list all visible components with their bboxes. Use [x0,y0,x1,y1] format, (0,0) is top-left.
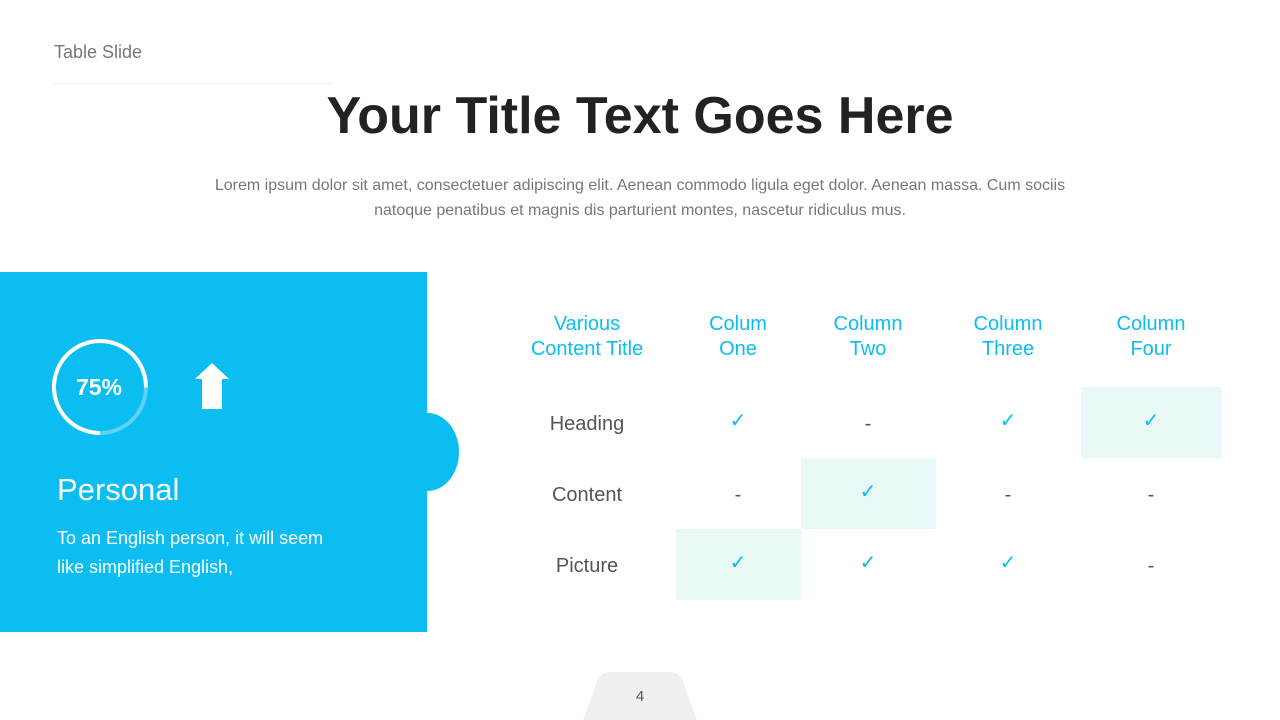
row: content: Content [552,484,622,506]
title: Your Title Text Goes Here [326,87,954,145]
icon: progress ring 75% [52,339,148,435]
table: Column [834,313,902,335]
table: Three [982,338,1034,360]
table: Four [1130,338,1172,360]
table: Colum [709,313,767,335]
panel heading: Personal [57,472,179,507]
table [531,313,1222,600]
panel: personal [0,272,459,632]
row: picture: Picture [556,555,618,577]
table: ✓ [1000,552,1016,574]
page number tab [583,672,697,720]
table: ✓ [1143,410,1159,432]
table: - [1148,484,1154,506]
table: ✓ [860,552,876,574]
table: ✓ [860,481,876,503]
icon: progress ring 75%: 75% [76,374,122,400]
row: heading: Heading [550,413,624,435]
shaded cells [1081,387,1222,458]
page number tab: 4 [636,688,644,705]
table: ✓ [730,410,746,432]
section label: Table Slide [54,42,142,62]
table: - [1148,555,1154,577]
table: ✓ [1000,410,1016,432]
table: - [735,484,741,506]
panel text: To an English person, it will seem like simplified English, [57,528,323,577]
table: - [865,413,871,435]
table: One [719,338,757,360]
table: ✓ [730,552,746,574]
table: Column [974,313,1042,335]
header row: Various [554,313,620,335]
header row [531,313,643,360]
subtitle text: Lorem ipsum dolor sit amet, consectetuer adipiscing elit. Aenean commodo ligula eget dolor. Aenean massa. Cum sociis natoque penatibus et magnis dis parturient montes, nascetur ridiculus mus. [215,177,1065,219]
header row: Content Title [531,338,643,360]
table: Two [850,338,886,360]
icon: up arrow [195,363,229,409]
table: - [1005,484,1011,506]
table: Column [1117,313,1185,335]
